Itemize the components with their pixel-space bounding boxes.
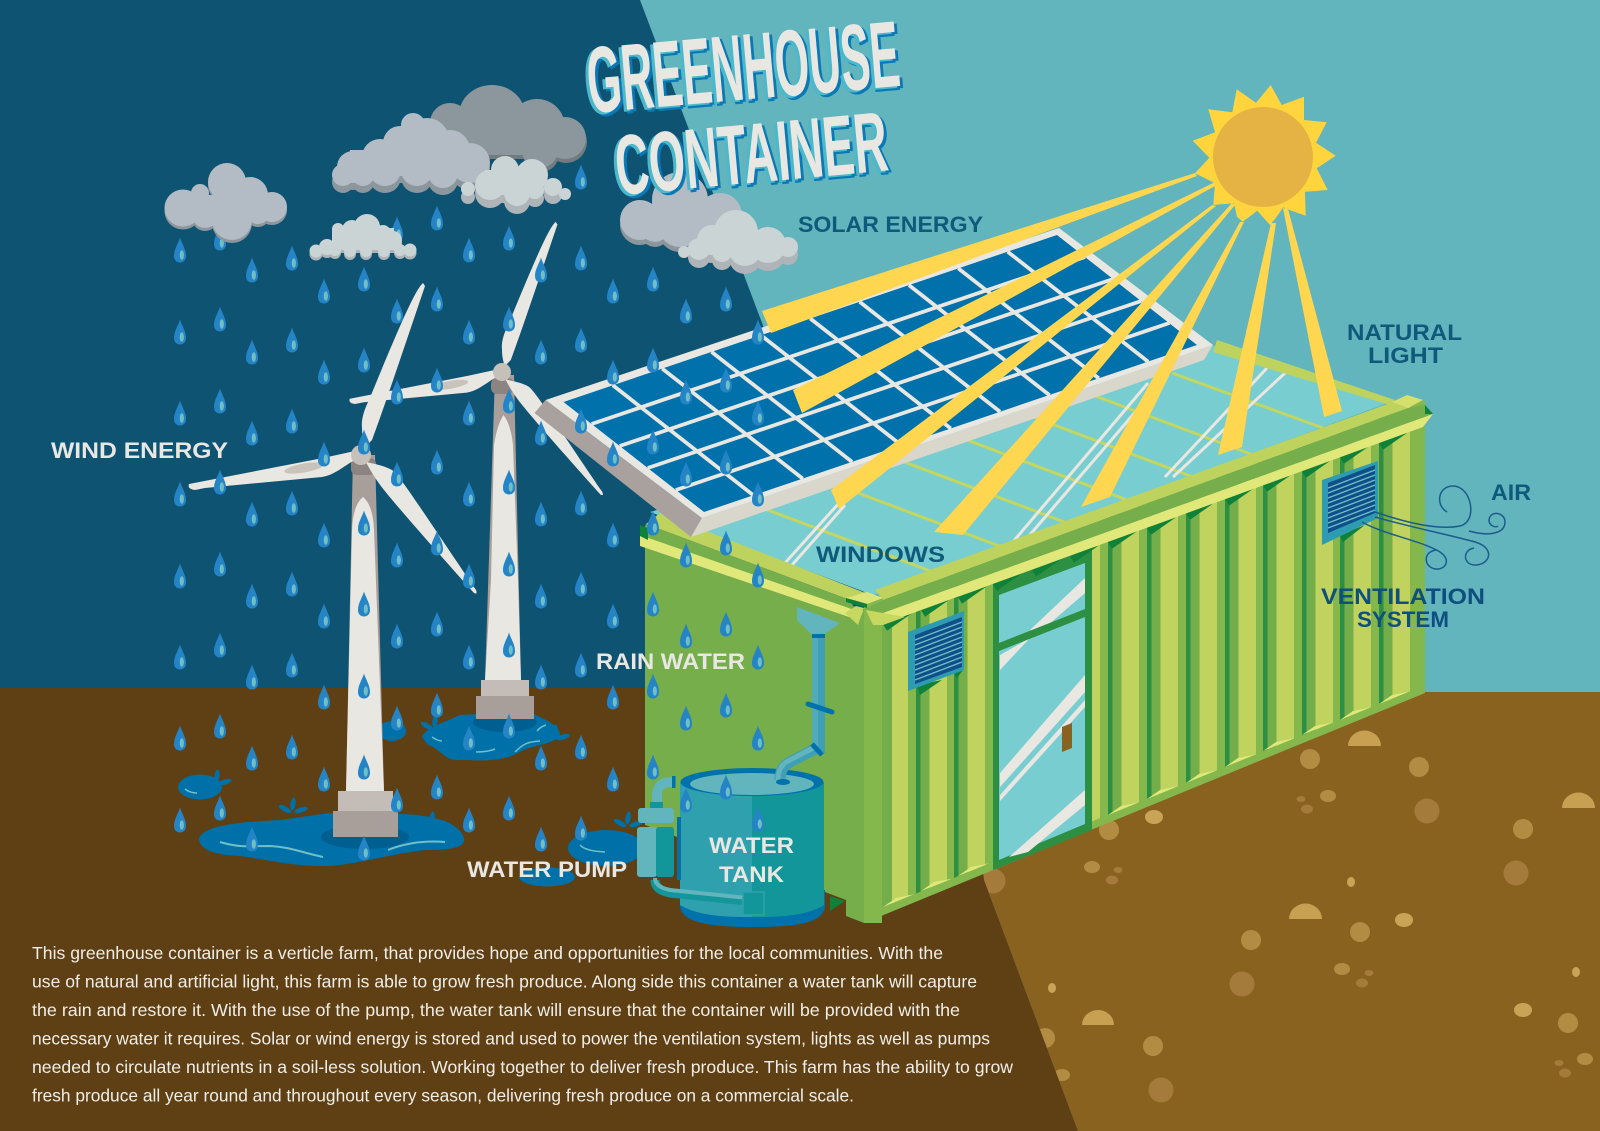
wind turbine front bbox=[189, 283, 477, 837]
label: air: AIR bbox=[1491, 480, 1531, 505]
label: natural light bbox=[1347, 320, 1462, 368]
puddles bbox=[178, 712, 644, 886]
label: natural light: NATURAL bbox=[1347, 320, 1462, 345]
downpipe and funnel bbox=[776, 607, 840, 785]
label: ventilation system bbox=[1321, 584, 1485, 632]
description paragraph: necessary water it requires. Solar or wind energy is stored and used to power the ventilation system, lights as well as pumps bbox=[32, 1028, 990, 1048]
air curls bbox=[1362, 486, 1505, 569]
wind turbine rear bbox=[349, 222, 603, 719]
description paragraph: fresh produce all year round and throughout every season, delivering fresh produce on a commercial scale. bbox=[32, 1086, 854, 1106]
sun bbox=[1193, 85, 1336, 225]
label: water pump: WATER PUMP bbox=[467, 857, 627, 882]
water pump bbox=[637, 776, 764, 915]
cloud: far left bbox=[164, 163, 287, 243]
cloud: grey under title bbox=[620, 172, 742, 252]
solar panel bbox=[534, 228, 1213, 537]
label: wind energy: WIND ENERGY bbox=[51, 438, 228, 463]
description paragraph: needed to circulate nutrients in a soil-less solution. Working together to deliver fresh produce. This farm has the ability to grow bbox=[32, 1057, 1013, 1077]
label: rain water: RAIN WATER bbox=[596, 649, 745, 674]
roof glass with window frame lines bbox=[650, 340, 1395, 595]
cloud: dark rear bbox=[430, 85, 587, 172]
container door bbox=[993, 547, 1092, 870]
ventilation grille rear bbox=[1322, 461, 1378, 545]
label: ventilation system: VENTILATION bbox=[1321, 584, 1485, 609]
description paragraph: This greenhouse container is a verticle farm, that provides hope and opportunities for the local communities. With the bbox=[32, 943, 943, 963]
container right corrugated wall bbox=[864, 380, 1426, 940]
label: water tank: TANK bbox=[719, 862, 784, 887]
cloud: light right of middle bbox=[461, 156, 571, 214]
label: ventilation system: SYSTEM bbox=[1357, 607, 1449, 632]
rail shadows under roof bbox=[883, 432, 1408, 695]
cloud: light near solar panel bbox=[678, 210, 798, 274]
title bbox=[583, 1, 904, 214]
label: water tank bbox=[709, 833, 794, 887]
sun rays bbox=[762, 173, 1342, 535]
label: windows: WINDOWS bbox=[816, 542, 945, 567]
description paragraph: the rain and restore it. With the use of the pump, the water tank will ensure that the container will be provided with the bbox=[32, 1000, 960, 1020]
rain drops bbox=[174, 164, 764, 860]
description paragraph bbox=[32, 943, 1013, 1106]
label: solar energy: SOLAR ENERGY bbox=[798, 212, 983, 237]
cloud: light small centre bbox=[310, 214, 416, 260]
label: natural light: LIGHT bbox=[1368, 343, 1444, 368]
roof rails bbox=[640, 395, 1433, 625]
description paragraph: use of natural and artificial light, this farm is able to grow fresh produce. Along side this container a water tank will capture bbox=[32, 972, 977, 992]
ventilation grille front bbox=[908, 611, 964, 691]
cloud: large middle bbox=[332, 113, 490, 195]
label: water tank: WATER bbox=[709, 833, 794, 858]
water tank bbox=[680, 768, 825, 927]
container left wall bbox=[645, 530, 882, 923]
title: CONTAINER bbox=[611, 95, 892, 214]
